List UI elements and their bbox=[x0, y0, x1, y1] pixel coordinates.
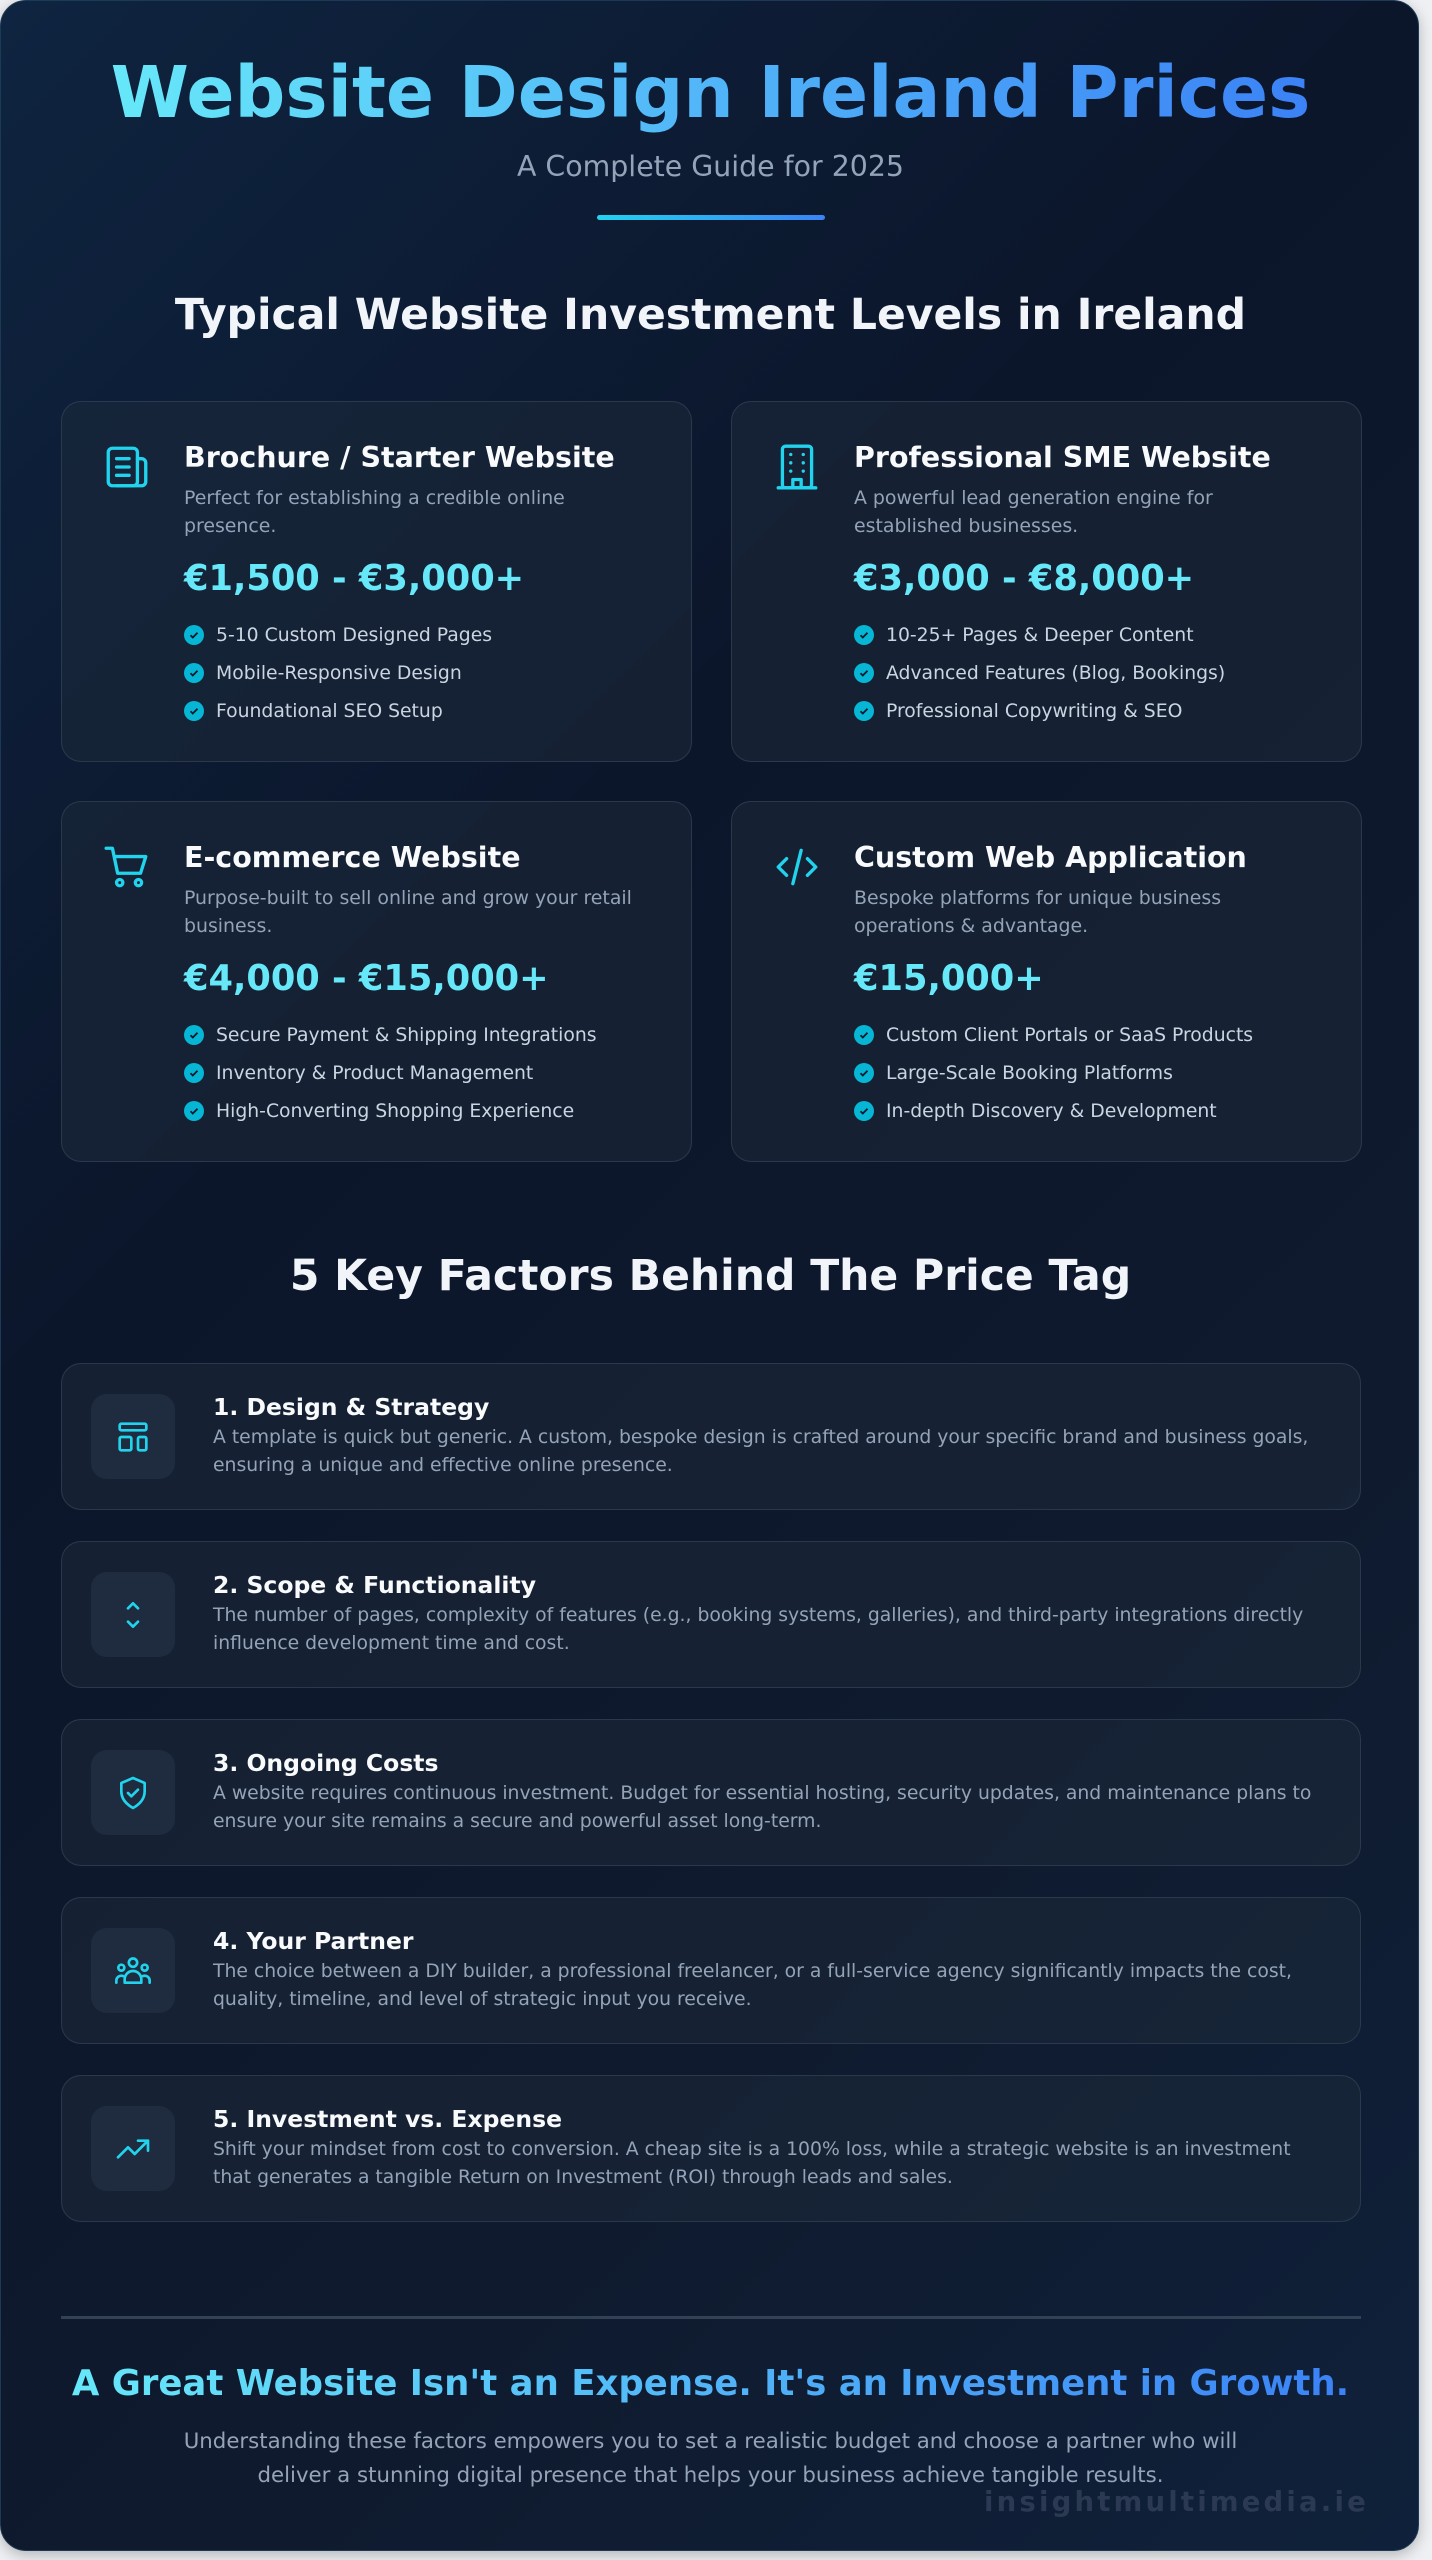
feature list: Professional Copywriting & SEO bbox=[886, 700, 1182, 722]
factor 2: The number of pages, complexity of features (e.g., booking systems, galleries), and third-party integrations directly bbox=[213, 1605, 1303, 1626]
conclusion text: deliver a stunning digital presence that helps your business achieve tangible results. bbox=[258, 2463, 1163, 2488]
factor 2: influence development time and cost. bbox=[213, 1633, 570, 1654]
factor 4: 4. Your Partner bbox=[213, 1927, 414, 1955]
title: Website Design Ireland Prices bbox=[111, 51, 1310, 134]
icon: building bbox=[776, 444, 818, 490]
icon: cart bbox=[104, 846, 148, 888]
accent bar bbox=[597, 215, 825, 220]
icon: shield bbox=[91, 1750, 175, 1835]
conclusion heading: A Great Website Isn't an Expense. It's an Investment in Growth. bbox=[72, 2363, 1349, 2404]
factor 2 bbox=[61, 1541, 1361, 1688]
icon: code bbox=[776, 848, 818, 886]
subtitle: A Complete Guide for 2025 bbox=[517, 150, 904, 183]
feature list: Foundational SEO Setup bbox=[216, 700, 443, 722]
card: e-commerce: E-commerce Website bbox=[184, 841, 521, 874]
card: professional SME: €3,000 - €8,000+ bbox=[854, 558, 1194, 599]
factor 1: 1. Design & Strategy bbox=[213, 1393, 489, 1421]
icon: layout bbox=[91, 1394, 175, 1479]
factor 2: 2. Scope & Functionality bbox=[213, 1571, 536, 1599]
card: custom web app: Bespoke platforms for unique business bbox=[854, 887, 1221, 909]
card: professional SME: Professional SME Website bbox=[854, 441, 1271, 474]
factor 3: 3. Ongoing Costs bbox=[213, 1749, 439, 1777]
factor 5: Shift your mindset from cost to conversion. A cheap site is a 100% loss, while a strategic website is an investment bbox=[213, 2139, 1291, 2160]
card: e-commerce bbox=[61, 801, 692, 1162]
card: professional SME bbox=[731, 401, 1362, 762]
card: brochure: presence. bbox=[184, 515, 276, 537]
icon: people bbox=[91, 1928, 175, 2013]
factor 5 bbox=[61, 2075, 1361, 2222]
card: brochure: €1,500 - €3,000+ bbox=[184, 558, 524, 599]
feature list: High-Converting Shopping Experience bbox=[216, 1100, 574, 1122]
factor 1 bbox=[61, 1363, 1361, 1510]
factor 5: 5. Investment vs. Expense bbox=[213, 2105, 562, 2133]
card: professional SME: established businesses. bbox=[854, 515, 1078, 537]
card: brochure bbox=[61, 401, 692, 762]
factor 3: ensure your site remains a secure and powerful asset long-term. bbox=[213, 1811, 821, 1832]
card: custom web app bbox=[731, 801, 1362, 1162]
watermark: insightmultimedia.ie bbox=[984, 2486, 1369, 2518]
conclusion text bbox=[184, 2429, 1237, 2488]
feature list bbox=[184, 1024, 597, 1122]
feature list: 5-10 Custom Designed Pages bbox=[216, 624, 492, 646]
card: custom web app: operations & advantage. bbox=[854, 915, 1088, 937]
card: professional SME: A powerful lead generation engine for bbox=[854, 487, 1213, 509]
factor 3 bbox=[61, 1719, 1361, 1866]
card: e-commerce: business. bbox=[184, 915, 272, 937]
factor 1: ensuring a unique and effective online presence. bbox=[213, 1455, 673, 1476]
feature list: 10-25+ Pages & Deeper Content bbox=[886, 624, 1194, 646]
card: custom web app: €15,000+ bbox=[854, 958, 1044, 999]
feature list: Inventory & Product Management bbox=[216, 1062, 533, 1084]
feature list bbox=[854, 624, 1225, 722]
feature list: Custom Client Portals or SaaS Products bbox=[886, 1024, 1253, 1046]
card: brochure: Brochure / Starter Website bbox=[184, 441, 615, 474]
factor 3: A website requires continuous investment. Budget for essential hosting, security updates, and maintenance plans to bbox=[213, 1783, 1311, 1804]
factor 4: The choice between a DIY builder, a professional freelancer, or a full-service agency significantly impacts the cost, bbox=[213, 1961, 1292, 1982]
feature list bbox=[854, 1024, 1253, 1122]
feature list: Large-Scale Booking Platforms bbox=[886, 1062, 1173, 1084]
icon: chevrons bbox=[91, 1572, 175, 1657]
feature list: In-depth Discovery & Development bbox=[886, 1100, 1217, 1122]
factor 4 bbox=[61, 1897, 1361, 2044]
feature list: Advanced Features (Blog, Bookings) bbox=[886, 662, 1225, 684]
feature list: Secure Payment & Shipping Integrations bbox=[216, 1024, 597, 1046]
card: custom web app: Custom Web Application bbox=[854, 841, 1247, 874]
conclusion text: Understanding these factors empowers you to set a realistic budget and choose a partner who will bbox=[184, 2429, 1237, 2454]
icon: trending up bbox=[91, 2106, 175, 2191]
factor 4: quality, timeline, and level of strategic input you receive. bbox=[213, 1989, 752, 2010]
icon: newspaper bbox=[106, 446, 148, 488]
feature list: Mobile-Responsive Design bbox=[216, 662, 462, 684]
feature list bbox=[184, 624, 492, 722]
card: brochure: Perfect for establishing a credible online bbox=[184, 487, 565, 509]
card: e-commerce: Purpose-built to sell online and grow your retail bbox=[184, 887, 632, 909]
heading: key factors: 5 Key Factors Behind The Price Tag bbox=[290, 1252, 1131, 1301]
card: e-commerce: €4,000 - €15,000+ bbox=[184, 958, 549, 999]
factor 5: that generates a tangible Return on Investment (ROI) through leads and sales. bbox=[213, 2167, 953, 2188]
factor 1: A template is quick but generic. A custom, bespoke design is crafted around your specific brand and business goals, bbox=[213, 1427, 1308, 1448]
heading: investment levels: Typical Website Investment Levels in Ireland bbox=[175, 291, 1246, 340]
